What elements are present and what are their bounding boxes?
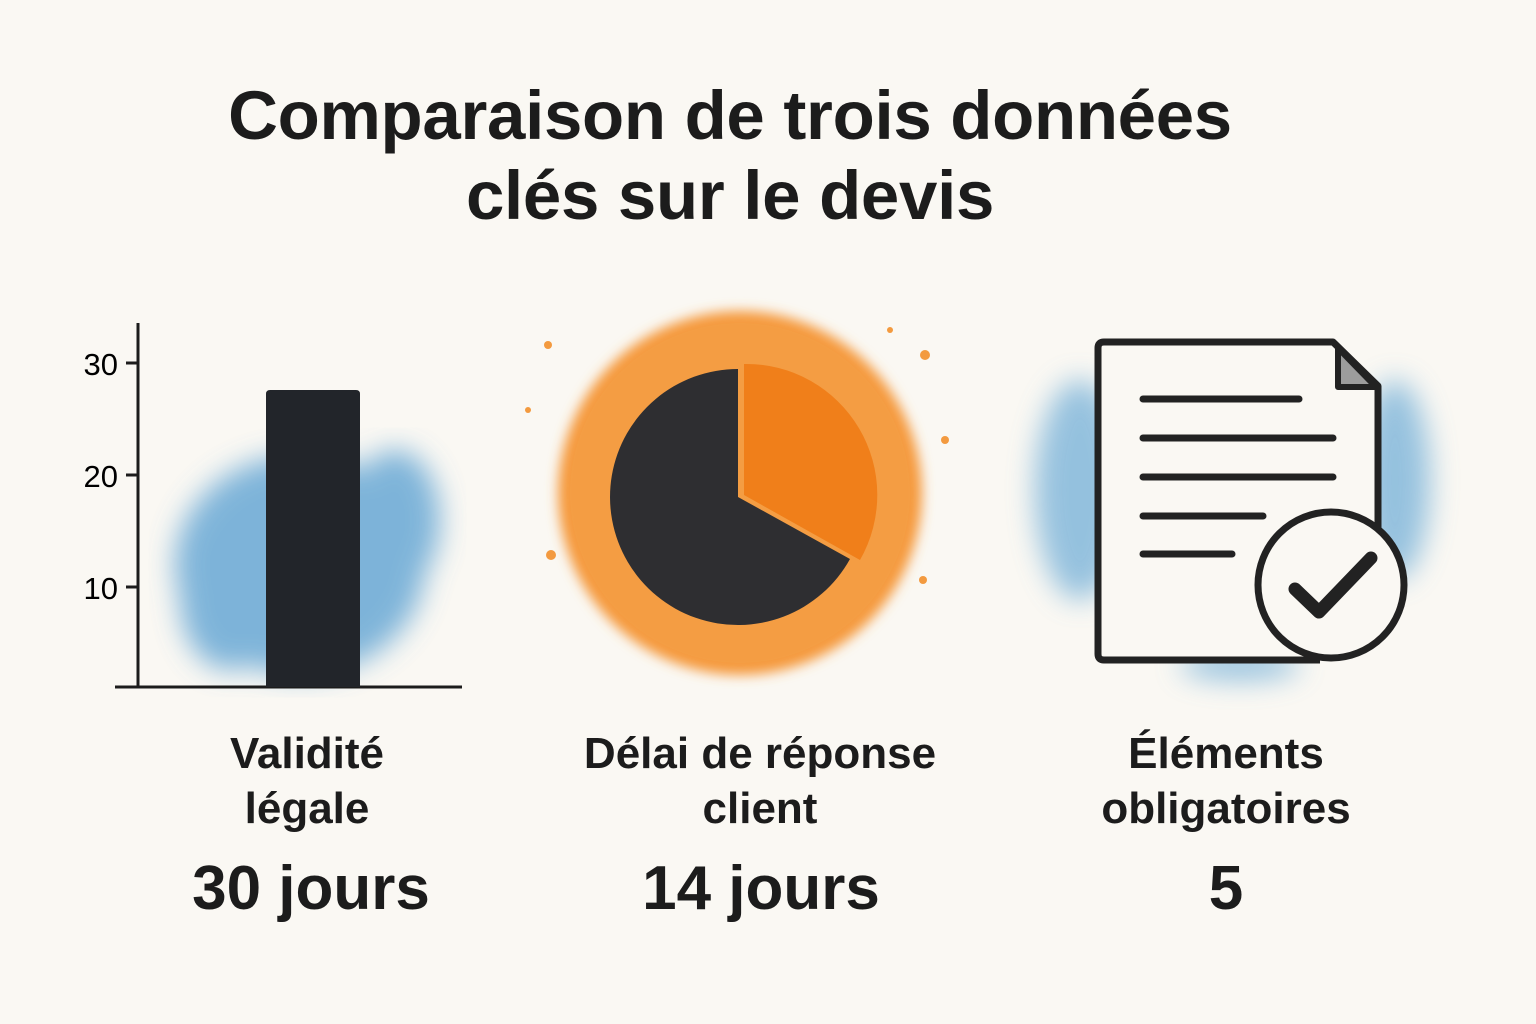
label: éléments obligatoires: obligatoires [1101, 784, 1351, 833]
label: délai de réponse client [584, 729, 936, 833]
value: 5: 5 [1209, 854, 1243, 923]
bar chart: 10 [84, 571, 118, 606]
label: délai de réponse client: client [703, 784, 817, 833]
title: Comparaison de trois données [228, 77, 1232, 154]
bar chart: 20 [84, 459, 118, 494]
pie chart [525, 311, 949, 675]
value: 30 jours: 30 jours [192, 854, 430, 923]
label: éléments obligatoires [1101, 729, 1351, 833]
value: 14 jours: 14 jours [642, 854, 880, 923]
label: validité légale: Validité [230, 729, 384, 778]
label: validité légale: légale [245, 784, 369, 833]
label: validité légale [230, 729, 384, 833]
label: délai de réponse client: Délai de réponse [584, 729, 936, 778]
bar chart: 30 [84, 347, 118, 382]
bar chart [84, 323, 462, 688]
title [228, 77, 1232, 234]
watercolor blob blue left [175, 450, 440, 675]
label: éléments obligatoires: Éléments [1128, 729, 1324, 778]
icon: document with check [1098, 342, 1404, 670]
title: clés sur le devis [466, 157, 994, 234]
watercolor blob blue right [1035, 380, 1430, 680]
